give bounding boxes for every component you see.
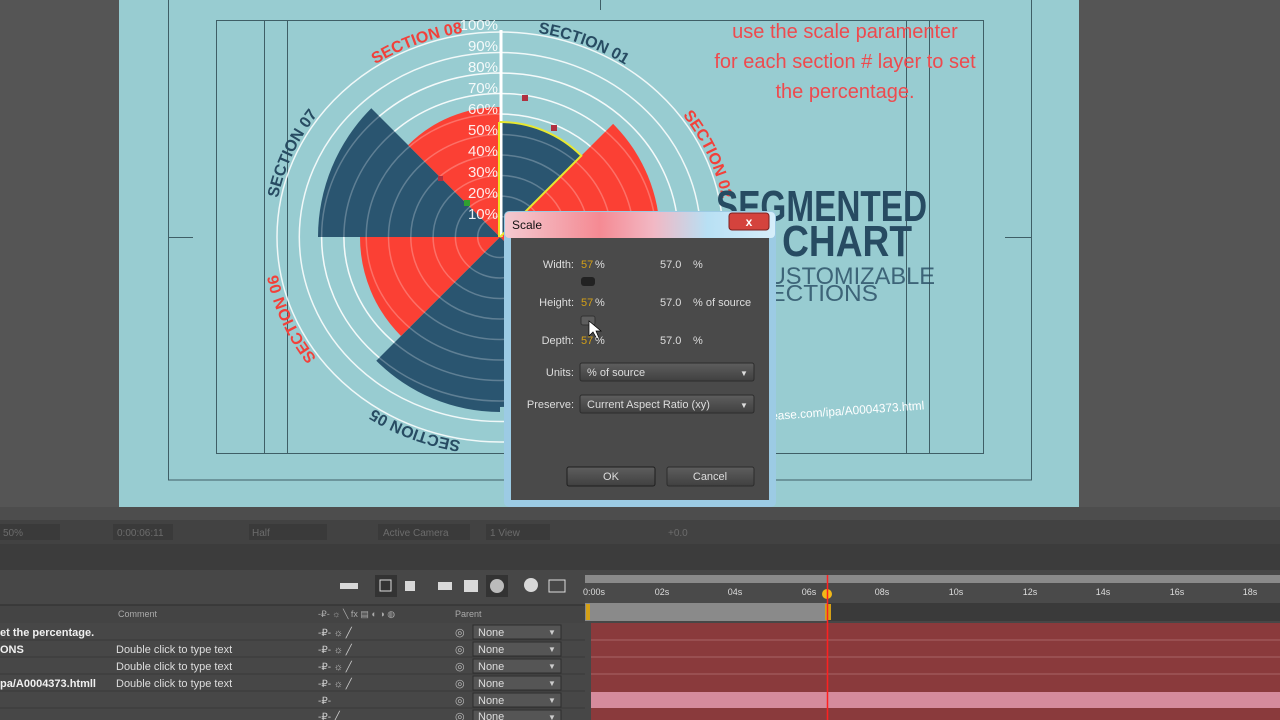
chart title: 8 CUSTOMIZABLE [732, 263, 935, 290]
selection outline [438, 30, 581, 237]
section labels: SECTION 08 [372, 22, 462, 63]
dialog fields: Depth: [542, 335, 574, 347]
dialog fields: 57 [581, 259, 593, 271]
dialog fields: % [595, 297, 605, 309]
time ruler: 02s [655, 587, 670, 597]
layer rows: ◎ [455, 661, 465, 673]
dialog fields: 57 [581, 297, 593, 309]
sector 04 [500, 237, 620, 407]
dialog fields: % of source [693, 297, 751, 309]
current time indicator [826, 575, 828, 720]
chart title [712, 182, 935, 306]
percentage axis labels: 40% [468, 143, 498, 160]
percentage axis labels: 30% [468, 164, 498, 181]
viewer toolbar: 0:00:06:11 [117, 528, 164, 539]
layer rows: pa/A0004373.htmll [0, 678, 96, 690]
sector 03 [500, 237, 650, 343]
source url: www.infoplease.com/ipa/A0004373.html [713, 398, 925, 427]
time ruler: 0:00s [583, 587, 606, 597]
dialog fields: 57.0 [660, 259, 681, 271]
column headers: Parent [455, 609, 482, 619]
chart: segmented pie [268, 17, 732, 452]
layer rows: None [478, 661, 504, 673]
layer rows: -₽- ☼ ╱ [318, 626, 353, 639]
dialog fields: ▼ [740, 369, 748, 378]
sector 05 [376, 237, 500, 412]
viewer background [0, 0, 1280, 520]
viewer toolbar [0, 507, 1280, 544]
viewer toolbar: +0.0 [668, 528, 688, 539]
dialog fields: % [595, 259, 605, 271]
section labels: SECTION 05 [369, 410, 460, 452]
guides [168, 0, 1032, 480]
time ruler: 14s [1096, 587, 1111, 597]
dialog: Scale: Scale [512, 218, 542, 232]
layer rows: -₽- ☼ ╱ [318, 660, 353, 673]
time ruler: 12s [1023, 587, 1038, 597]
sector 08 [408, 107, 500, 237]
dialog fields [527, 259, 754, 486]
column headers [118, 608, 482, 620]
section labels: SECTION 02 [684, 110, 732, 198]
dialog fields: % of source [587, 367, 645, 379]
sector 07 [318, 108, 500, 237]
section labels [268, 22, 732, 452]
layer bars [591, 623, 1280, 720]
dialog fields: Cancel [693, 471, 727, 483]
viewer toolbar: 50% [3, 528, 23, 539]
dialog fields: % [693, 335, 703, 347]
instruction note: the percentage. [776, 81, 914, 103]
dialog fields: OK [603, 471, 620, 483]
timeline panel [0, 544, 1280, 720]
percentage axis labels: 50% [468, 122, 498, 139]
layer rows: Double click to type text [116, 678, 232, 690]
percentage axis labels: 20% [468, 185, 498, 202]
composition canvas [119, 0, 1079, 507]
dialog fields: Preserve: [527, 399, 574, 411]
dialog fields: % [595, 335, 605, 347]
percentage axis labels: 70% [468, 80, 498, 97]
chart title: SEGMENTED [716, 182, 927, 231]
layer rows: Double click to type text [116, 661, 232, 673]
section labels: SECTION 04 [537, 406, 632, 454]
layer rows: ▼ [548, 679, 556, 688]
time ruler: 04s [728, 587, 743, 597]
viewer toolbar: 1 View [490, 528, 521, 539]
percentage axis labels [460, 17, 498, 223]
section labels: SECTION 06 [268, 276, 315, 363]
sector 01 [500, 122, 581, 237]
time ruler: 16s [1170, 587, 1185, 597]
time ruler: 18s [1243, 587, 1258, 597]
percentage axis labels: 10% [468, 206, 498, 223]
dialog fields: Height: [539, 297, 574, 309]
layer rows: ▼ [548, 696, 556, 705]
dialog fields: Current Aspect Ratio (xy) [587, 399, 710, 411]
layer rows: -₽- ☼ ╱ [318, 677, 353, 690]
dialog fields: ▼ [740, 401, 748, 410]
section labels: SECTION 01 [539, 22, 628, 64]
layer rows: ONS [0, 644, 24, 656]
section labels: SECTION 07 [268, 108, 315, 197]
layer rows: Double click to type text [116, 644, 232, 656]
dialog fields: 57 [581, 335, 593, 347]
viewer toolbar: Half [252, 528, 270, 539]
dialog fields: 57.0 [660, 335, 681, 347]
layer rows: None [478, 644, 504, 656]
dialog fields: 57.0 [660, 297, 681, 309]
layer rows: ▼ [548, 628, 556, 637]
chart title: PIE CHART [712, 217, 912, 266]
layer rows: ▼ [548, 645, 556, 654]
time ruler: 10s [949, 587, 964, 597]
close button [729, 213, 769, 230]
dialog fields: Units: [546, 367, 574, 379]
instruction note: for each section # layer to set [714, 51, 976, 73]
percentage axis labels: 90% [468, 38, 498, 55]
dialog: Scale: x [746, 215, 753, 229]
instruction note: use the scale paramenter [732, 21, 958, 43]
instruction note [714, 21, 976, 103]
percentage axis labels: 60% [468, 101, 498, 118]
layer rows: -₽- ☼ ╱ [318, 643, 353, 656]
percentage axis labels: 80% [468, 59, 498, 76]
viewer toolbar: Active Camera [383, 528, 449, 539]
layer rows: None [478, 678, 504, 690]
column headers: -₽- ☼ ╲ fx ▤ ◐ ◑ ◍ [318, 608, 395, 620]
layer rows: ◎ [455, 627, 465, 639]
layer rows: ◎ [455, 678, 465, 690]
layer rows: ◎ [455, 644, 465, 656]
percentage axis labels: 100% [460, 17, 498, 34]
layer rows: et the percentage. [0, 627, 94, 639]
layer rows: None [478, 695, 504, 707]
layer rows: ▼ [548, 662, 556, 671]
time ruler: 08s [875, 587, 890, 597]
chart title: SECTIONS [753, 280, 878, 306]
dialog: Scale [504, 211, 776, 507]
time ruler: 06s [802, 587, 817, 597]
sector 06 [360, 237, 500, 336]
timeline tool icons [340, 575, 565, 597]
layer rows [0, 623, 585, 720]
column headers: Comment [118, 609, 158, 619]
layer rows: None [478, 627, 504, 639]
dialog fields: Width: [543, 259, 574, 271]
layer rows: ◎ [455, 695, 465, 707]
section labels: SECTION 03 [680, 274, 735, 367]
dialog fields: % [693, 259, 703, 271]
layer rows: -₽- [318, 696, 331, 707]
time ruler [583, 575, 1280, 621]
sector 02 [500, 124, 660, 237]
